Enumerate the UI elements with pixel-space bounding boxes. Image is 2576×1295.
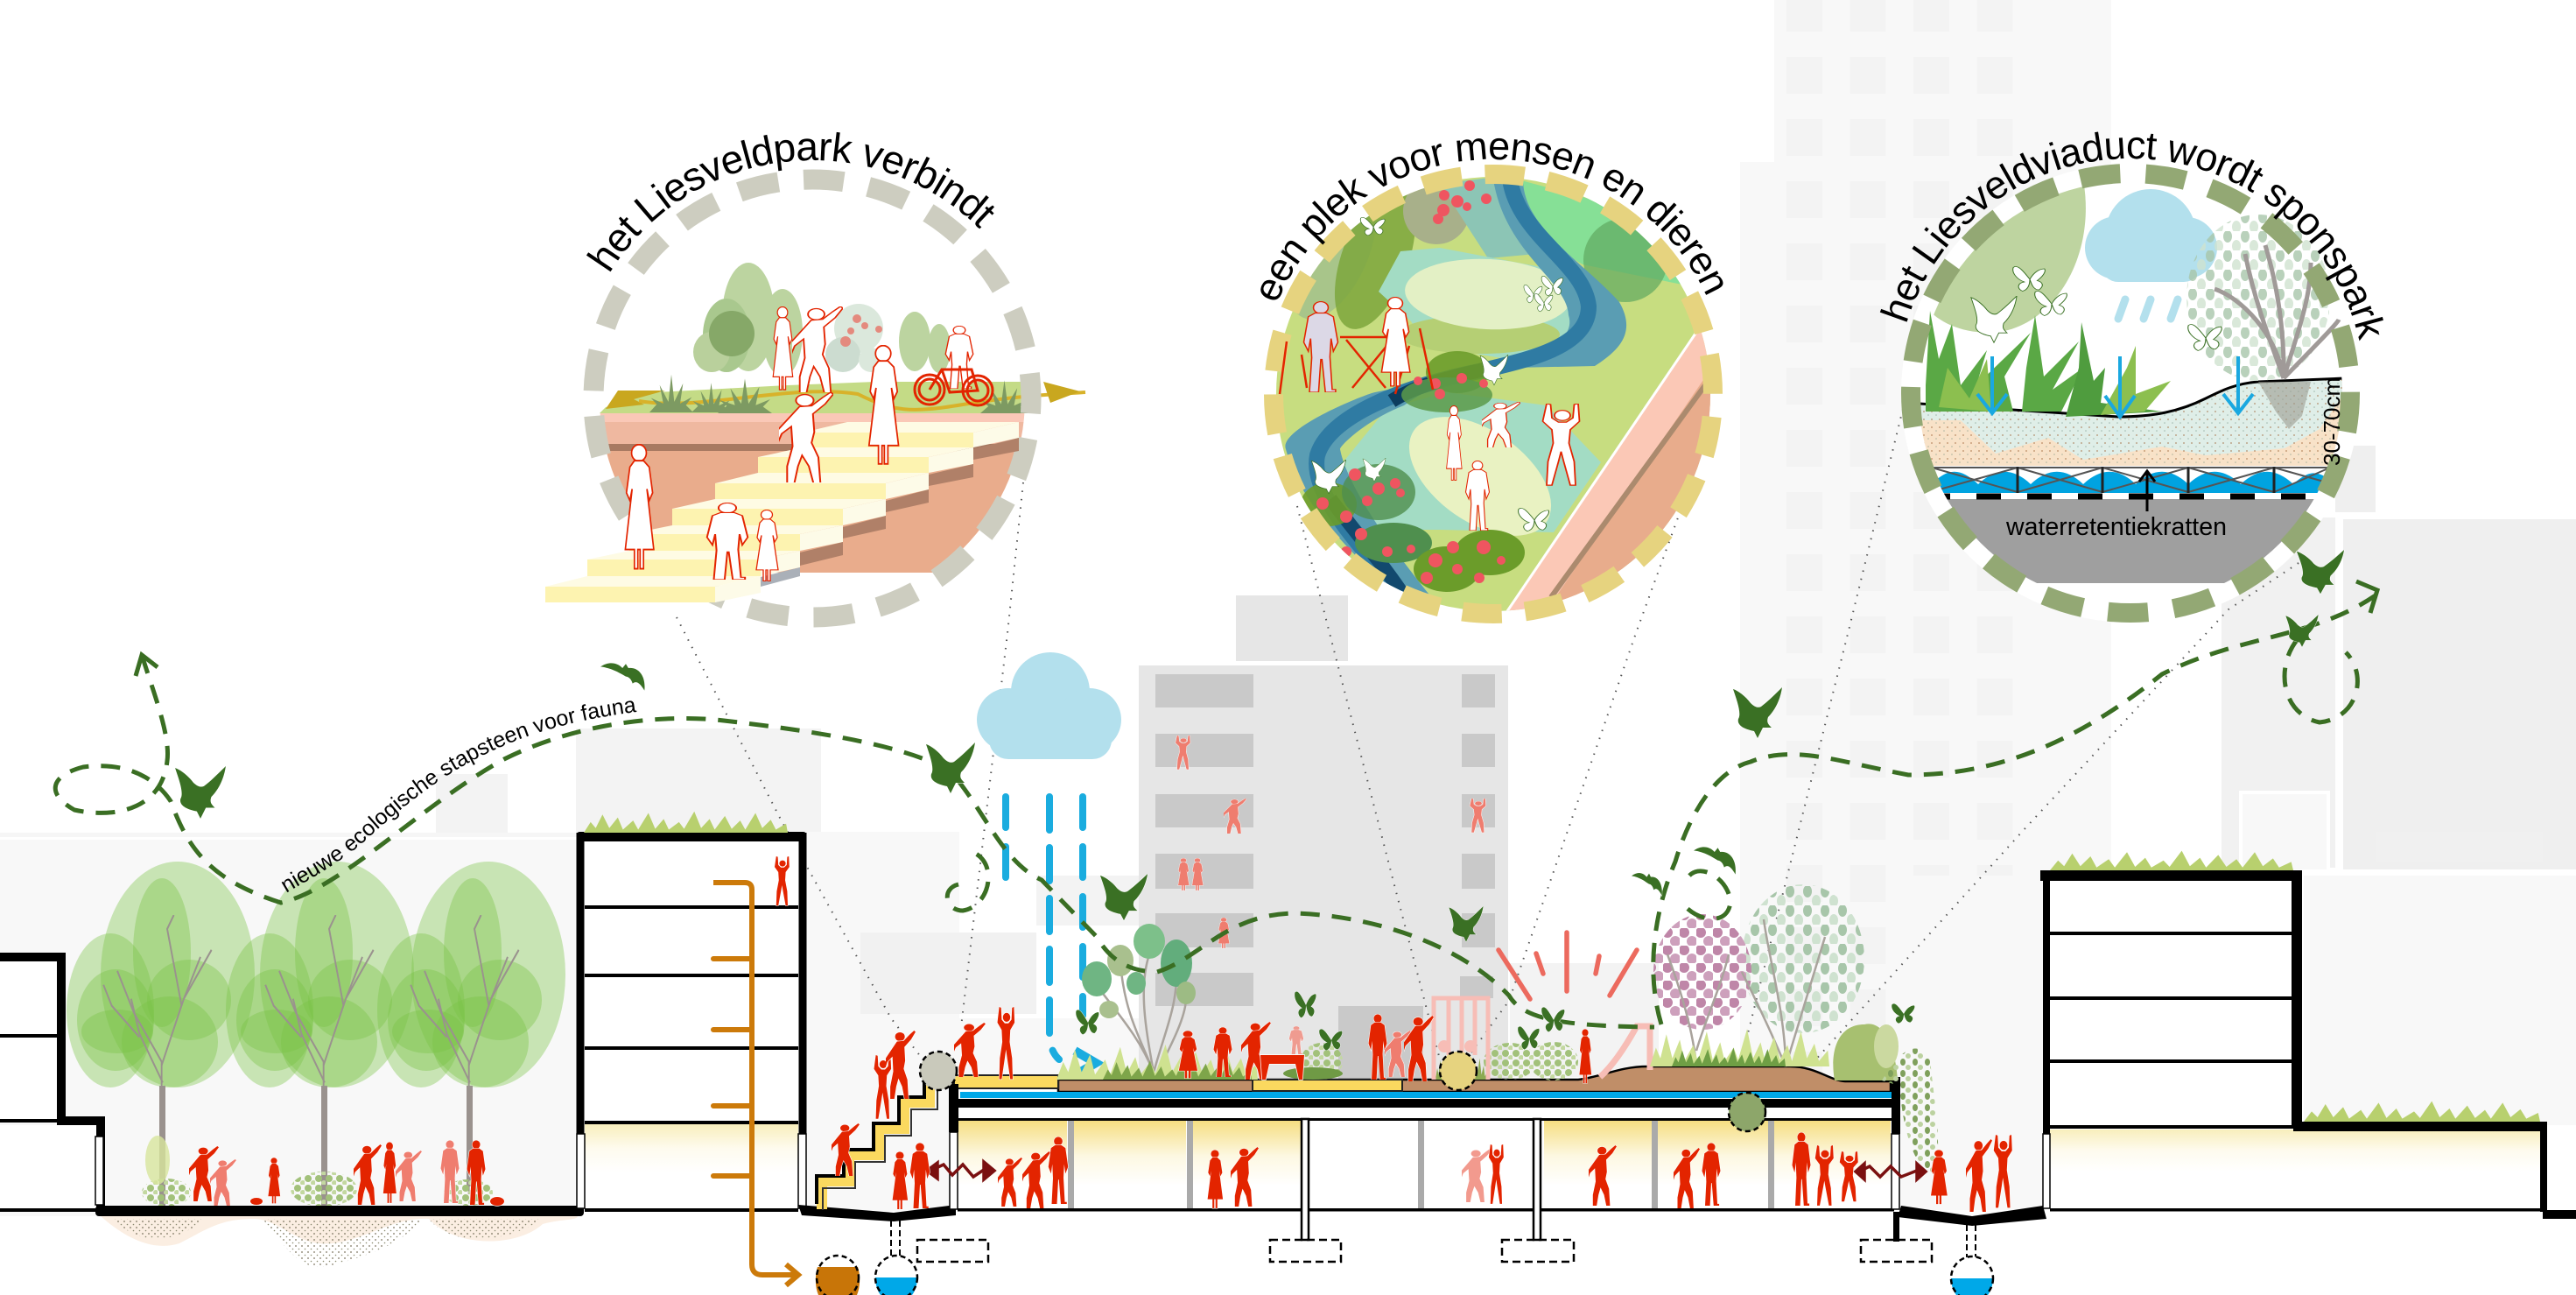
viaduct park deck and interior [917, 1066, 1932, 1262]
concrete deck [954, 1099, 1892, 1108]
wall strata [586, 413, 1042, 573]
right deck trees and bush [1650, 884, 1938, 1173]
dashed ring [593, 179, 1031, 617]
circle panel: een plek voor mensen en dieren [1260, 138, 1723, 623]
label: depth: 30-70cm [2319, 377, 2345, 466]
red figures: street level [186, 856, 790, 1211]
white bird and butterflies [1971, 266, 2222, 350]
shrubs at the foot of the street trees [142, 1136, 493, 1207]
wavy connection arrows [927, 1162, 1926, 1179]
ground soil and infiltration under street [101, 1216, 578, 1267]
curved title: het Liesveldpark verbindt [586, 131, 994, 271]
building far left [0, 957, 103, 1212]
tall building left of the viaduct [577, 812, 806, 1212]
cloud with rain [2085, 189, 2217, 319]
rain water drain lines [1006, 797, 1096, 1075]
label: waterretentiekratten: waterretentiekratten [2005, 513, 2227, 541]
red figures: on the deck [1179, 1014, 1591, 1087]
lawn strip [600, 382, 1029, 413]
sunken court floor left [798, 1205, 956, 1221]
pocket tree on deck [1082, 924, 1196, 1073]
dotted leader lines from the circles [677, 409, 2299, 1092]
ecological stepping stone flight path [55, 595, 2376, 1027]
planting [1926, 311, 2171, 417]
green roof [584, 812, 788, 833]
yellow interior segments [958, 1120, 1891, 1209]
label: nieuwe ecologische stapsteen voor fauna: nieuwe ecologische stapsteen voor fauna [282, 700, 637, 893]
white disc [1901, 164, 2360, 623]
staircase [545, 422, 1019, 602]
mound and soil layer [1058, 1066, 1891, 1092]
end walls [949, 1077, 1900, 1242]
sunken court floor right [1898, 1206, 2046, 1226]
children playing [1447, 402, 1579, 531]
grass tufts [649, 375, 1028, 413]
green roofs [2050, 851, 2293, 870]
deck planting [1056, 1042, 1578, 1080]
tree with roots [2186, 215, 2339, 429]
infiltration arrows [1977, 356, 2253, 417]
dashed ring [1274, 174, 1713, 614]
structural columns [1302, 1119, 1541, 1240]
grey interior columns [1068, 1121, 1774, 1208]
orange drainage pipe [713, 883, 798, 1285]
orange water tank [816, 1256, 860, 1295]
small dashed section markers [920, 1052, 1765, 1131]
retention crate arrow [2139, 471, 2155, 511]
people in apartment windows [1176, 735, 1485, 948]
white butterflies and birds [1311, 217, 1563, 531]
bicycle [915, 369, 993, 405]
fauna silhouettes: birds, bats, butterflies [175, 550, 2344, 1051]
paved paths on deck [954, 1075, 1402, 1091]
rain cloud [977, 652, 1121, 759]
park illustration: trees [693, 263, 951, 377]
outlined people on the stairs and path [625, 306, 973, 581]
play equipment: swing and slide [1434, 998, 1650, 1080]
dashed ring [1911, 173, 2350, 613]
flight path arrowheads [136, 581, 2377, 676]
garden plan view [1276, 177, 1710, 611]
plaza floor [95, 1206, 584, 1216]
pile foundations [917, 1240, 1932, 1262]
circle panel: het Liesveldviaduct wordt sponspark [1880, 131, 2383, 623]
blue water tank left [875, 1221, 917, 1295]
building right [2040, 851, 2576, 1219]
background: central apartment block [1139, 595, 1508, 1080]
gold path arrow [606, 382, 1085, 410]
blue water tank right [1951, 1225, 1993, 1295]
curved title: een plek voor mensen en dieren [1260, 138, 1723, 299]
water layer [960, 1092, 1892, 1098]
concrete stairs [817, 1073, 937, 1210]
cafe table and seated people [1280, 298, 1433, 394]
cross-section illustration [1920, 187, 2342, 583]
red figures: court and stairs [828, 1007, 1068, 1214]
red figures: viaduct interior [1208, 1132, 2012, 1219]
curved title: het Liesveldviaduct wordt sponspark [1880, 131, 2383, 341]
circle panel: het Liesveldpark verbindt [545, 131, 1085, 627]
joy rays [1499, 933, 1637, 999]
left street trees [67, 862, 565, 1207]
